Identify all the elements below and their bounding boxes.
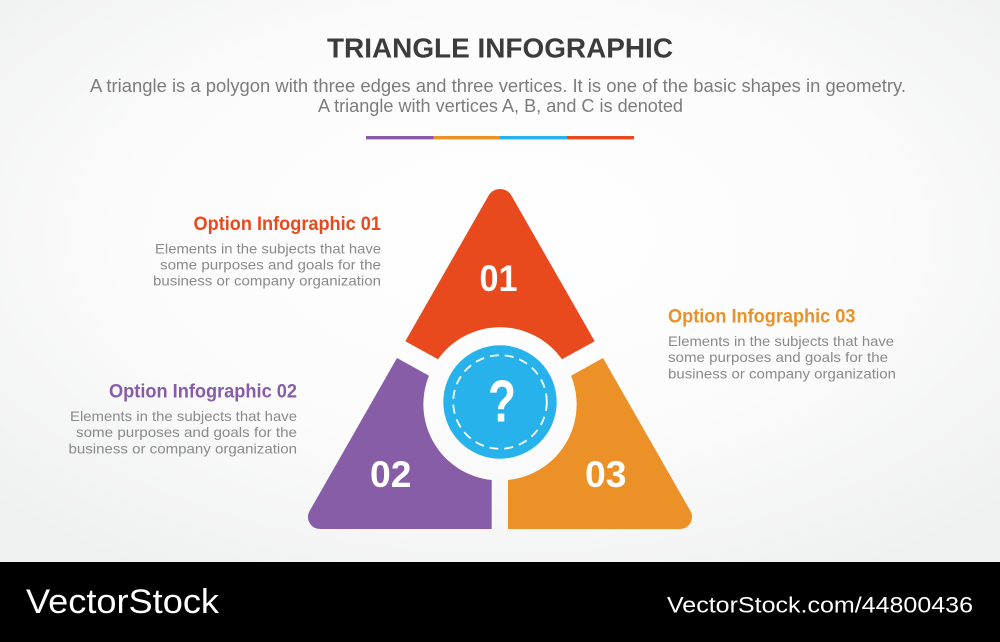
panel: option 01 text: [153, 213, 381, 289]
panel: option 02 text: [68, 380, 297, 456]
text block: option 01: [153, 240, 381, 289]
text block: option 02: business or company organization: [68, 440, 297, 456]
segment 02: purple: [308, 358, 492, 529]
heading: option 02: Option Infographic 02: [109, 380, 297, 402]
title: TRIANGLE INFOGRAPHIC: [327, 32, 673, 64]
footer logo: VectorStock: [26, 583, 220, 621]
number 02: 02: [370, 453, 412, 495]
triangle diagram: [308, 189, 692, 529]
number 03: 03: [585, 453, 626, 495]
segment 01: red: [405, 189, 595, 359]
subtitle: A triangle with vertices A, B, and C is denoted: [318, 96, 683, 116]
icon: question mark circle: [443, 345, 557, 459]
heading: option 01: Option Infographic 01: [194, 213, 381, 235]
text block: option 03: business or company organization: [668, 365, 896, 381]
segment 03: orange: [508, 358, 692, 529]
panel: option 03 text: [668, 306, 896, 381]
text block: option 02: Elements in the subjects that have: [70, 408, 297, 424]
text block: option 03: Elements in the subjects that have: [668, 333, 894, 349]
subtitle: [90, 76, 906, 116]
footer url: VectorStock.com/44800436: [667, 593, 973, 618]
heading: option 03: Option Infographic 03: [668, 306, 856, 328]
icon: question mark circle: ?: [488, 368, 516, 434]
subtitle: A triangle is a polygon with three edges and three vertices. It is one of the basic shapes in geometry.: [90, 76, 906, 96]
text block: option 02: [68, 408, 297, 456]
footer bar: [0, 562, 1000, 642]
text block: option 03: some purposes and goals for the: [668, 349, 888, 365]
text block: option 03: [668, 333, 896, 381]
text block: option 02: some purposes and goals for the: [76, 424, 297, 440]
text block: option 01: some purposes and goals for the: [160, 256, 381, 272]
text block: option 01: business or company organization: [153, 273, 381, 289]
colour divider: [366, 136, 634, 139]
text block: option 01: Elements in the subjects that have: [155, 240, 381, 256]
number 01: 01: [480, 257, 518, 299]
